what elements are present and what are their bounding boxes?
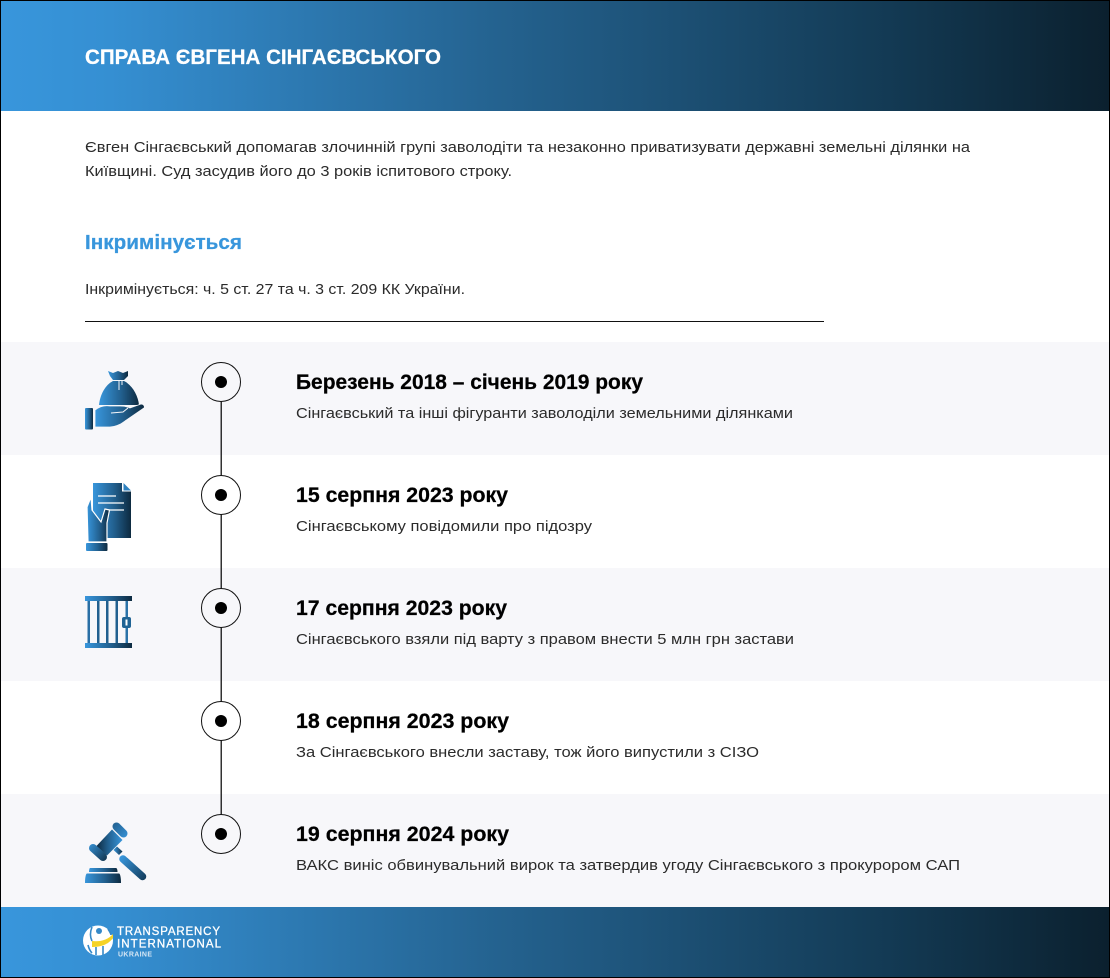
- event 1: Сінгаєвський та інші фігуранти заволоділи земельними ділянками: [296, 405, 793, 422]
- footer banner: [0, 907, 1110, 978]
- event 3: Сінгаєвського взяли під варту з правом внести 5 млн грн застави: [296, 631, 794, 648]
- logo: Transparency International Ukraine: INTERNATIONAL: [117, 938, 222, 950]
- event 4: [296, 710, 759, 761]
- intro text: Євген Сінгаєвський допомагав злочинній групі заволодіти та незаконно приватизувати державні земельні ділянки на: [85, 139, 971, 156]
- intro text: [85, 139, 971, 180]
- icon: hand holding document: [86, 483, 131, 551]
- event 3: 17 серпня 2023 року: [296, 597, 507, 620]
- row backgrounds: [0, 342, 1110, 907]
- event 4: 18 серпня 2023 року: [296, 710, 509, 733]
- event 5: ВАКС виніс обвинувальний вирок та затвердив угоду Сінгаєвського з прокурором САП: [296, 857, 960, 874]
- icon: prison bars: [85, 596, 132, 648]
- event 2: [296, 484, 593, 535]
- header banner: [0, 0, 1110, 111]
- event 2: Сінгаєвському повідомили про підозру: [296, 518, 593, 535]
- event 2: 15 серпня 2023 року: [296, 484, 508, 507]
- timeline: [202, 362, 240, 854]
- event 4: За Сінгаєвського внесли заставу, тож його випустили з СІЗО: [296, 744, 759, 761]
- logo: Transparency International Ukraine: TRANSPARENCY: [117, 926, 220, 938]
- marker 5: [202, 814, 240, 854]
- charges text: Інкримінується: ч. 5 ст. 27 та ч. 3 ст. 209 КК України.: [85, 281, 465, 298]
- marker 3: [202, 588, 240, 628]
- event 5: [296, 823, 960, 874]
- icon: money bag on hand: [85, 371, 144, 430]
- section heading: Інкримінується: [85, 232, 242, 254]
- event 5: 19 серпня 2024 року: [296, 823, 509, 846]
- event 1: Березень 2018 – січень 2019 року: [296, 371, 643, 394]
- icon: judge gavel: [85, 826, 142, 883]
- logo: Transparency International Ukraine: UKRAINE: [118, 952, 152, 958]
- event 3: [296, 597, 794, 648]
- event 1: [296, 371, 793, 422]
- title: СПРАВА ЄВГЕНА СІНГАЄВСЬКОГО: [85, 46, 441, 69]
- marker 2: [202, 476, 240, 514]
- marker 1: [202, 362, 240, 402]
- logo: Transparency International Ukraine: [83, 926, 222, 958]
- intro text: Київщині. Суд засудив його до 3 років іспитового строку.: [85, 163, 512, 180]
- marker 4: [202, 702, 240, 740]
